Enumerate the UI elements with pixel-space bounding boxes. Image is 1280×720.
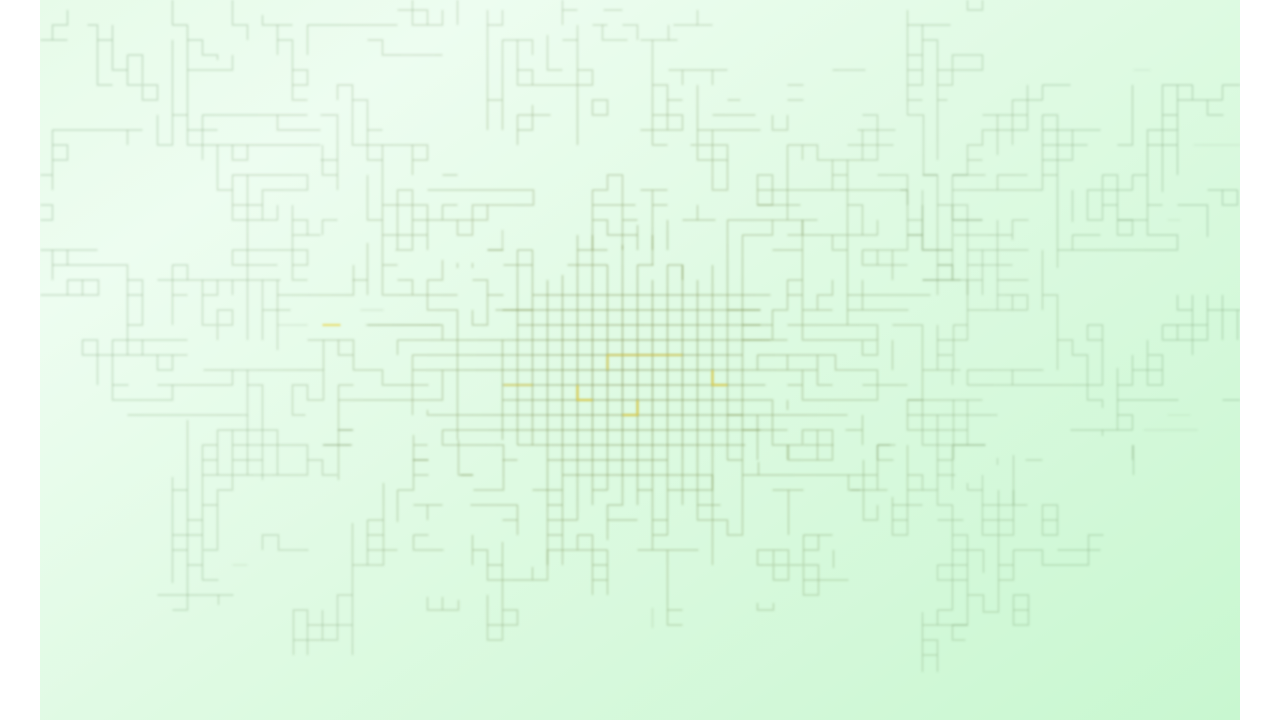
highlighted yellow path segments	[322, 325, 728, 415]
